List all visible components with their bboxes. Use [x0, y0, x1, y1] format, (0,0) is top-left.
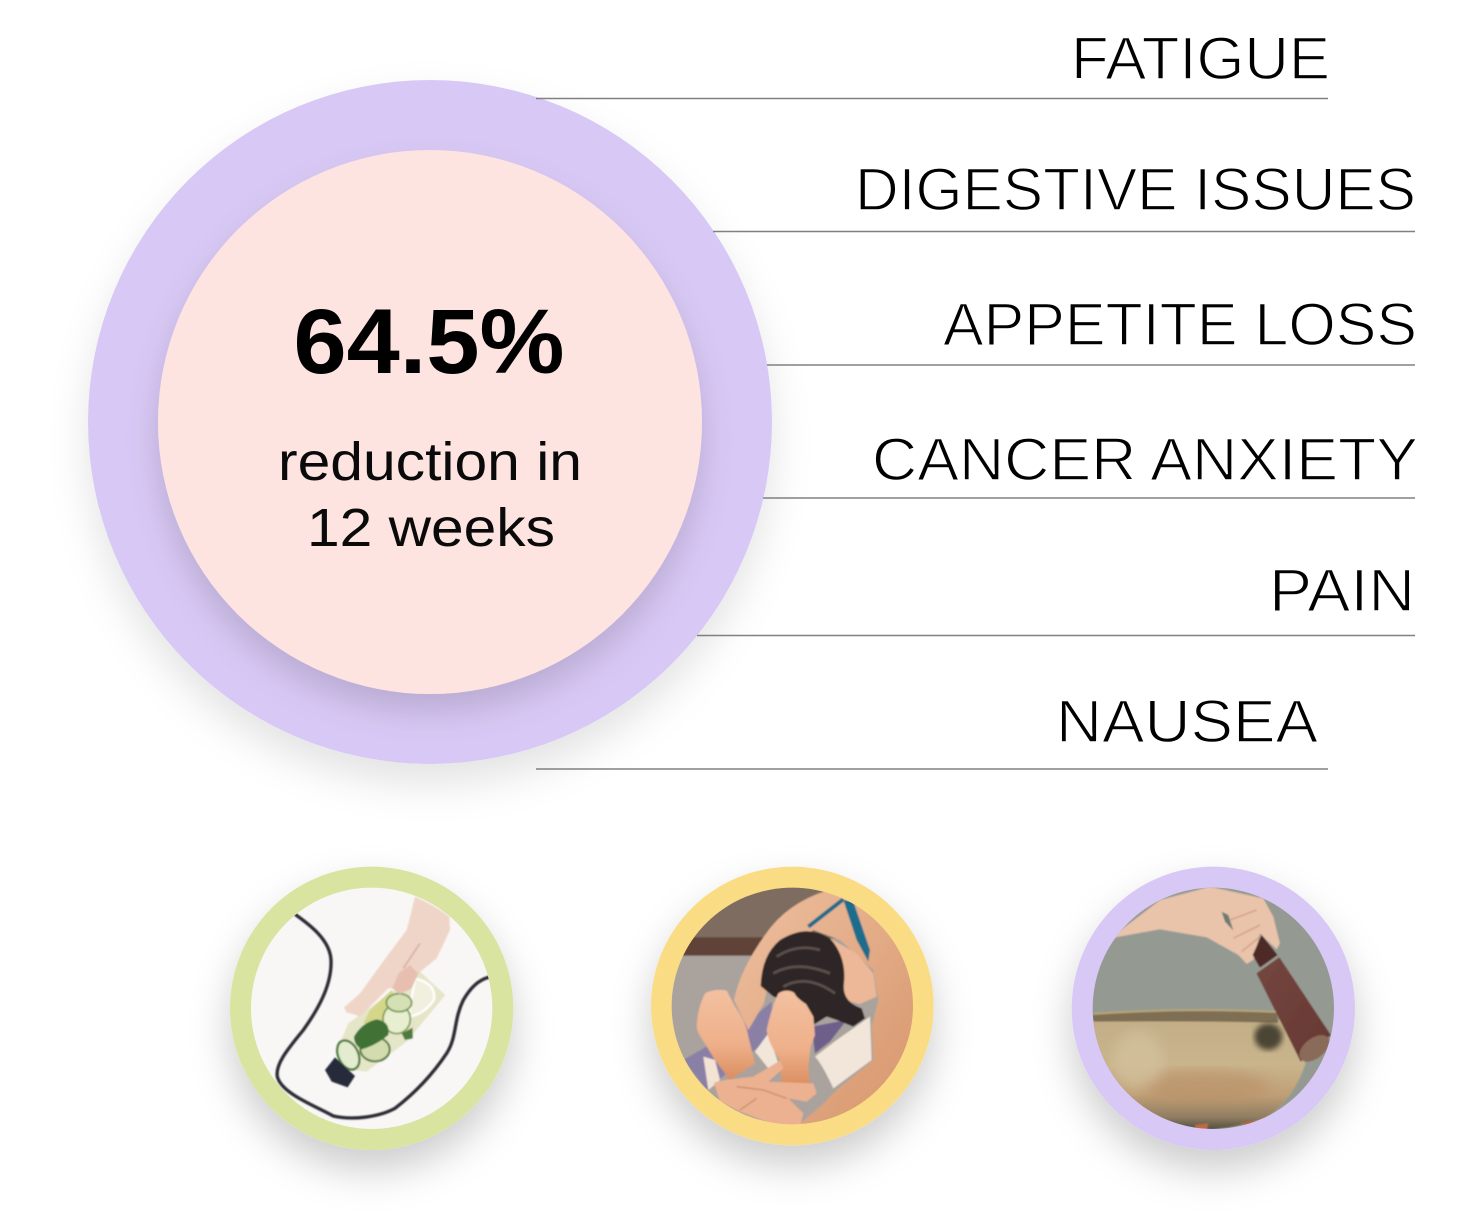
statistic value: 64.5%	[294, 291, 564, 393]
hair	[761, 931, 865, 1027]
hands	[714, 1061, 817, 1127]
bowl	[1092, 1020, 1306, 1131]
statistic description: reduction in	[278, 432, 582, 492]
outer lavender ring	[88, 80, 772, 764]
face	[830, 938, 877, 1004]
inner pink circle	[158, 150, 702, 694]
black cable	[277, 915, 488, 1118]
list of reduced symptoms	[536, 25, 1418, 769]
statistic description: 12 weeks	[307, 498, 555, 558]
photo: singing bowl with mallet	[1072, 867, 1355, 1150]
label: digestive issues: DIGESTIVE ISSUES	[855, 156, 1416, 223]
hand	[344, 897, 450, 1017]
hand	[1110, 887, 1280, 964]
bottle	[338, 972, 445, 1072]
strap	[808, 899, 843, 927]
mallet handle	[1253, 935, 1277, 967]
feet	[697, 990, 755, 1080]
label: nausea: NAUSEA	[1056, 688, 1318, 755]
mat	[683, 1002, 773, 1090]
label: fatigue: FATIGUE	[1071, 25, 1330, 92]
leggings	[815, 1017, 872, 1088]
label: cancer anxiety: CANCER ANXIETY	[872, 426, 1418, 493]
panel: main statistic circle	[88, 80, 772, 764]
thumb gap	[1222, 912, 1233, 931]
photo: cucumber water bottle	[230, 867, 513, 1150]
label: pain: PAIN	[1269, 557, 1415, 624]
photo: seated yoga stretch	[651, 867, 934, 1145]
torso and arms	[734, 887, 917, 1127]
label: appetite loss: APPETITE LOSS	[943, 291, 1417, 358]
mallet head	[1257, 957, 1331, 1062]
